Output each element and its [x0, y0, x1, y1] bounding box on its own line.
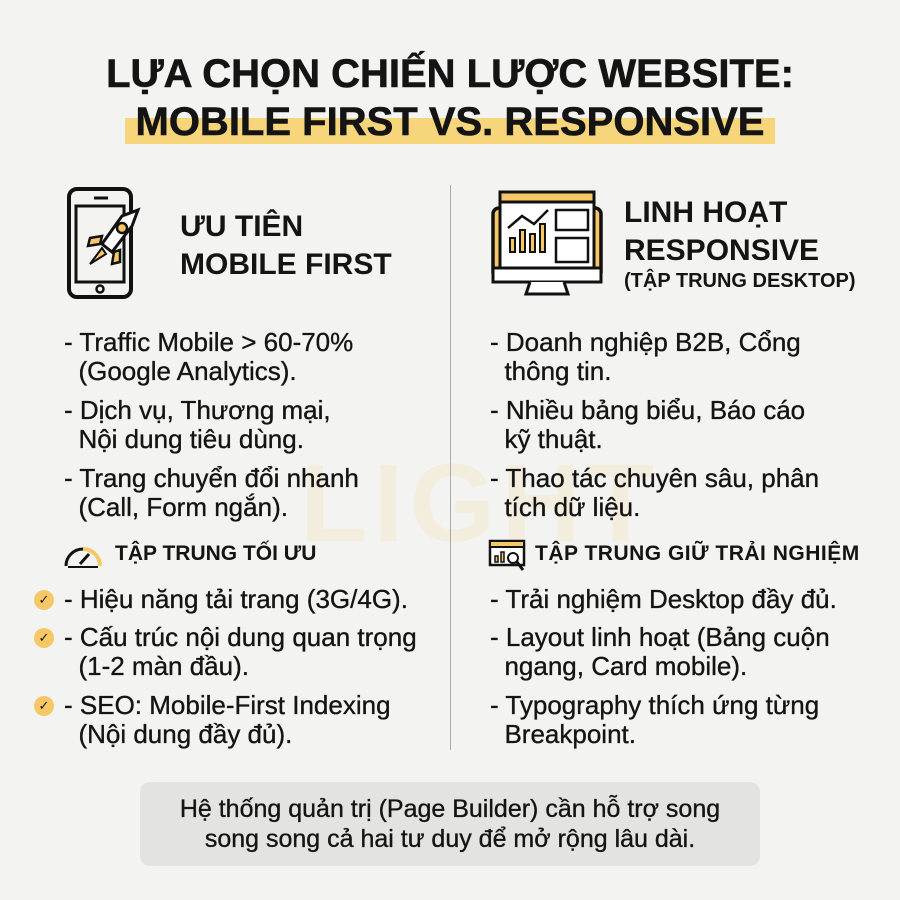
right experience list: - Typography thích ứng từng — [490, 690, 819, 720]
right list: tích dữ liệu. — [504, 492, 640, 522]
check list: - SEO: Mobile-First Indexing — [64, 690, 391, 720]
check list: ✓ — [39, 698, 49, 713]
right experience list: Breakpoint. — [504, 719, 636, 749]
icon: analytics window — [488, 540, 526, 571]
subheading: optimize: TẬP TRUNG TỐI ƯU — [115, 542, 316, 565]
heading: mobile first — [180, 209, 392, 281]
right experience list — [490, 584, 837, 749]
title: LỰA CHỌN CHIẾN LƯỢC WEBSITE: — [106, 52, 794, 96]
subheading: experience: TẬP TRUNG GIỮ TRẢI NGHIỆM — [535, 542, 860, 565]
right experience list: - Layout linh hoạt (Bảng cuộn — [490, 622, 830, 652]
footer callout — [140, 782, 760, 866]
check list: (1-2 màn đầu). — [78, 651, 249, 681]
heading: responsive — [624, 196, 856, 292]
heading: mobile first: MOBILE FIRST — [180, 248, 392, 281]
footer callout: Hệ thống quản trị (Page Builder) cần hỗ trợ song — [180, 795, 720, 823]
right list: kỹ thuật. — [504, 424, 603, 454]
heading: responsive: RESPONSIVE — [624, 234, 819, 267]
check list: (Nội dung đầy đủ). — [78, 719, 292, 749]
right list — [490, 327, 819, 522]
heading: responsive: (TẬP TRUNG DESKTOP) — [624, 270, 856, 292]
right list: thông tin. — [504, 356, 611, 386]
left list: (Call, Form ngắn). — [78, 492, 288, 522]
check list — [34, 584, 417, 749]
watermark: LIGHT — [300, 442, 660, 565]
right list: - Nhiều bảng biểu, Báo cáo — [490, 395, 805, 425]
title — [106, 50, 794, 144]
footer callout: song song cả hai tư duy để mở rộng lâu dài. — [205, 825, 695, 853]
left list: - Trang chuyển đổi nhanh — [64, 463, 359, 493]
icon: phone with rocket — [67, 187, 140, 299]
check list: - Cấu trúc nội dung quan trọng — [64, 622, 417, 652]
left list: Nội dung tiêu dùng. — [78, 424, 304, 454]
right experience list: - Trải nghiệm Desktop đầy đủ. — [490, 584, 837, 614]
left list: - Traffic Mobile > 60-70% — [64, 327, 353, 357]
check list: ✓ — [39, 630, 49, 645]
right list: - Thao tác chuyên sâu, phân — [490, 463, 819, 493]
icon: desktop monitor — [491, 190, 603, 296]
check list: - Hiệu năng tải trang (3G/4G). — [64, 584, 408, 614]
divider — [450, 185, 451, 750]
left list — [64, 327, 359, 522]
heading: mobile first: ƯU TIÊN — [180, 210, 303, 243]
icon: speedometer — [64, 547, 102, 568]
title: MOBILE FIRST VS. RESPONSIVE — [136, 100, 764, 144]
heading: responsive: LINH HOẠT — [624, 196, 787, 229]
right list: - Doanh nghiệp B2B, Cổng — [490, 327, 801, 357]
check list: ✓ — [39, 592, 49, 607]
left list: - Dịch vụ, Thương mại, — [64, 395, 331, 425]
left list: (Google Analytics). — [78, 356, 297, 386]
right experience list: ngang, Card mobile). — [504, 651, 747, 681]
